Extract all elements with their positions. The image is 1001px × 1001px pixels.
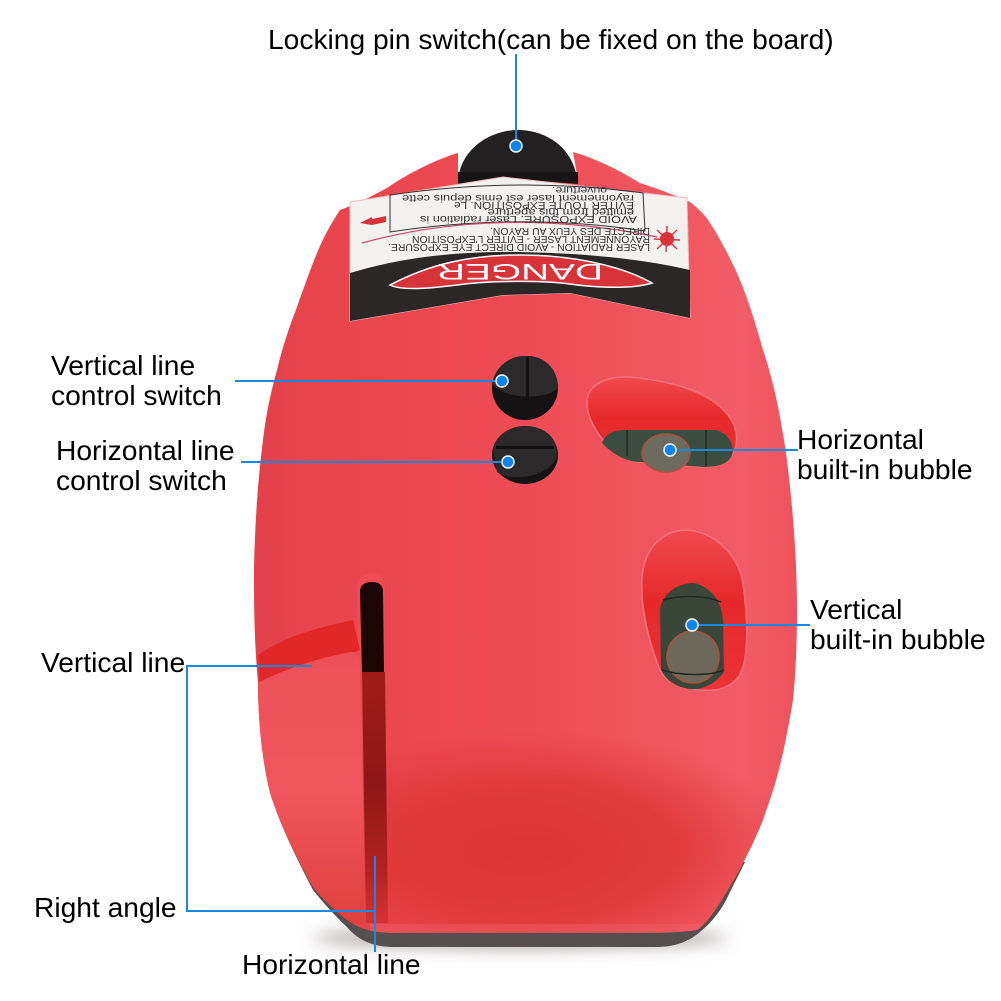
horizontal line control knob xyxy=(492,426,558,484)
callout: horizontal built-in bubble: built-in bubble xyxy=(797,453,973,485)
vertical line control knob xyxy=(492,356,558,420)
danger label: emitted from this aperture. xyxy=(484,206,634,217)
callout: right angle: Right angle xyxy=(34,891,177,923)
callout: vertical line control switch: Vertical line xyxy=(51,349,195,381)
danger label: EVITER TOUTE EXPOSITION. Le xyxy=(453,199,634,210)
danger label: RAYONNEMENT LASER - EVITER L'EXPOSITION xyxy=(412,233,650,244)
danger label xyxy=(350,177,690,321)
callout: horizontal line control switch: Horizontal line xyxy=(56,434,235,466)
horizontal bubble window xyxy=(587,377,736,472)
right-angle block xyxy=(258,620,366,925)
callout: vertical built-in bubble: Vertical xyxy=(810,593,902,625)
danger label: DANGER xyxy=(437,259,603,284)
callout: vertical line control switch: control switch xyxy=(51,379,222,411)
locking pin front band xyxy=(458,172,578,184)
dark base plate xyxy=(276,810,745,947)
ground shadow xyxy=(312,927,728,949)
body shading xyxy=(363,748,764,933)
danger label: ouverture. xyxy=(552,184,607,195)
red body xyxy=(254,152,797,933)
danger label: DIRECTE DES YEUX AU RAYON. xyxy=(490,225,650,236)
danger label: AVOID EXPOSURE. Laser radiation is xyxy=(420,213,637,224)
callout: vertical built-in bubble xyxy=(686,593,986,655)
callout: vertical built-in bubble: built-in bubble xyxy=(810,623,986,655)
danger label: LASER RADIATION - AVOID DIRECT EYE EXPOSURE. xyxy=(388,241,650,252)
callout: horizontal line: Horizontal line xyxy=(242,948,421,980)
callout: horizontal line control switch: control switch xyxy=(56,464,227,496)
callout: vertical line: Vertical line xyxy=(41,646,185,678)
callout: vertical line control switch xyxy=(51,349,508,411)
vertical bubble window xyxy=(642,530,747,690)
callout: locking pin switch: Locking pin switch(can be fixed on the board) xyxy=(268,23,834,55)
callout: horizontal built-in bubble: Horizontal xyxy=(797,423,924,455)
callout: horizontal line control switch xyxy=(56,434,514,496)
callout: horizontal built-in bubble xyxy=(664,423,973,485)
callout: locking pin switch xyxy=(268,23,834,152)
danger label: rayonnement laser est émis depuis cette xyxy=(401,192,634,203)
laser level device xyxy=(254,130,800,970)
callout: vertical line xyxy=(41,646,312,911)
locking pin switch xyxy=(458,130,578,200)
vertical slot xyxy=(357,573,388,923)
